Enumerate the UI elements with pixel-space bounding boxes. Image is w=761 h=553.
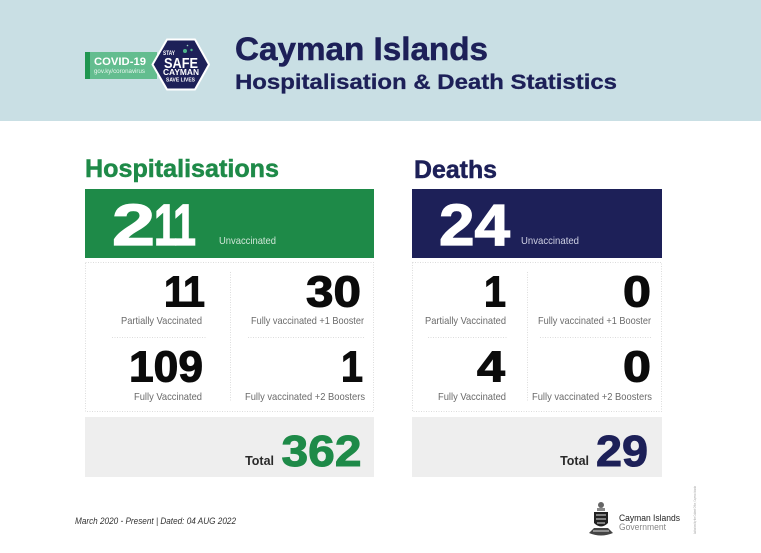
stat: fully vaccinated: Fully Vaccinated: [134, 391, 202, 403]
heading: deaths: Deaths: [414, 156, 497, 184]
stat: fully vaccinated +2 boosters: [245, 342, 365, 403]
stat: partially vaccinated: 1: [183, 268, 205, 316]
total: deaths: 29: [596, 427, 648, 476]
unvaccinated banner: 1: [154, 193, 177, 258]
stat: fully vaccinated: 109: [129, 342, 203, 392]
stat: fully vaccinated: 4: [477, 342, 506, 392]
unvaccinated banner: 2: [112, 193, 155, 258]
unvaccinated banner: Unvaccinated: [521, 235, 579, 247]
stat: fully vaccinated +2 boosters: Fully vaccinated +2 Boosters: [532, 391, 652, 403]
stat: fully vaccinated +1 booster: 0: [623, 268, 651, 316]
stat: partially vaccinated: [425, 268, 506, 327]
stat: fully vaccinated +2 boosters: Fully vaccinated +2 Boosters: [245, 391, 365, 403]
total: hospitalisations: Total: [245, 454, 274, 468]
logo: covid-19 stay safe badge: COVID-19: [94, 56, 146, 68]
logo: covid-19 stay safe badge: CAYMAN: [163, 68, 199, 77]
subtitle: Hospitalisation & Death Statistics: [235, 70, 617, 94]
unvaccinated banner: [85, 189, 374, 258]
vertical credit line: Authorised by the Cabinet Office, Cayman Islands: [693, 486, 697, 534]
title: Cayman Islands: [235, 31, 488, 67]
heading: hospitalisations: Hospitalisations: [85, 155, 279, 183]
vaccinated breakdown grid: [86, 262, 374, 412]
icon: coat of arms: [589, 502, 613, 536]
stat: fully vaccinated +1 booster: [538, 268, 651, 327]
total: deaths: Total: [560, 454, 589, 468]
logo: covid-19 stay safe badge: [85, 40, 209, 90]
stat: partially vaccinated: 1: [164, 268, 186, 316]
logo: cayman islands government: Cayman Islands: [619, 513, 680, 523]
logo: covid-19 stay safe badge: SAVE LIVES: [166, 78, 195, 84]
logo: covid-19 stay safe badge: gov.ky/coronavirus: [94, 68, 146, 75]
stat: fully vaccinated: [438, 342, 506, 403]
unvaccinated banner: [412, 189, 662, 258]
total: hospitalisations: [85, 417, 374, 477]
stat: fully vaccinated +1 booster: Fully vaccinated +1 Booster: [538, 315, 651, 327]
footnote: date range: March 2020 - Present | Dated: 04 AUG 2022: [75, 516, 236, 526]
unvaccinated banner: 24: [439, 193, 510, 258]
unvaccinated banner: Unvaccinated: [219, 235, 276, 247]
total: deaths: [412, 417, 662, 477]
logo: covid-19 stay safe badge: SAFE: [164, 55, 198, 72]
stat: fully vaccinated +1 booster: 30: [306, 268, 361, 316]
stat: fully vaccinated +2 boosters: 1: [341, 342, 363, 392]
stat: partially vaccinated: 1: [484, 268, 506, 316]
stat: partially vaccinated: [121, 268, 205, 327]
stat: fully vaccinated +2 boosters: [532, 342, 652, 403]
stat: partially vaccinated: Partially Vaccinated: [121, 315, 202, 327]
stat: fully vaccinated +1 booster: [251, 268, 364, 327]
panel: deaths: [412, 156, 662, 477]
panel: hospitalisations: [85, 155, 374, 477]
logo: cayman islands government: [589, 502, 680, 536]
stat: fully vaccinated +2 boosters: 0: [623, 342, 651, 392]
header band: [0, 0, 761, 121]
unvaccinated banner: 1: [173, 193, 196, 258]
total: hospitalisations: 362: [282, 427, 362, 476]
stat: partially vaccinated: Partially Vaccinated: [425, 315, 506, 327]
vaccinated breakdown grid: [412, 262, 662, 412]
stat: fully vaccinated: Fully Vaccinated: [438, 391, 506, 403]
stat: fully vaccinated +1 booster: Fully vaccinated +1 Booster: [251, 315, 364, 327]
logo: cayman islands government: Government: [619, 522, 666, 532]
logo: covid-19 stay safe badge: STAY: [163, 51, 175, 57]
